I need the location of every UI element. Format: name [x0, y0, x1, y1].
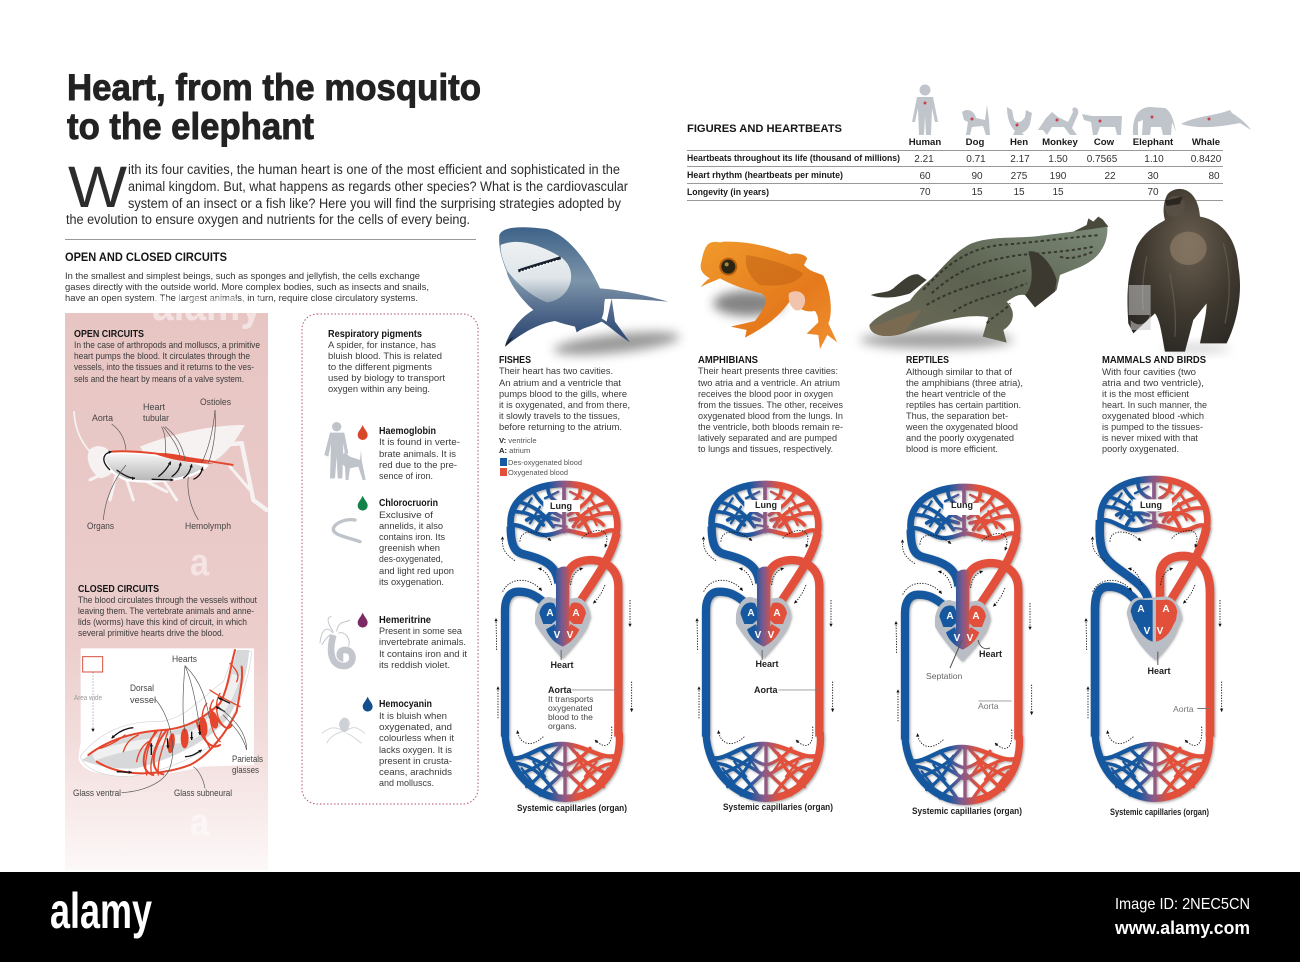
column: amphibians: two atria and a ventricle. An atrium	[698, 377, 840, 388]
column: reptiles: Although similar to that of	[906, 366, 1012, 377]
intro text: W	[68, 155, 127, 220]
column: amphibians: receives the blood poor in oxygen	[698, 388, 833, 399]
column: mammals and birds: With four cavities (two	[1102, 366, 1196, 377]
diagram: worm closed circuit: Dorsal	[130, 683, 154, 693]
column: amphibians: oxygenated blood from the lungs. In	[698, 410, 843, 421]
diagram: worm closed circuit: Area wide	[74, 695, 102, 702]
legend: V: ventricle	[499, 436, 537, 445]
diagram: amphibian circulation	[697, 484, 833, 812]
text: closed circuits	[78, 594, 257, 638]
diagram: mammal circulation: Heart	[1147, 666, 1171, 676]
legend: Des-oxygenated blood	[508, 458, 582, 467]
diagram: reptile circulation: Septation	[926, 671, 963, 681]
diagram: fish circulation	[496, 484, 632, 813]
column: reptiles: ween the oxygenated blood	[905, 421, 1018, 432]
column: reptiles: blood is more efficient.	[906, 443, 998, 454]
footer bar: Image ID: 2NEC5CN	[1115, 896, 1250, 913]
table row labels: Heart rhythm (heartbeats per minute)	[687, 170, 843, 181]
text: circuits intro	[65, 270, 429, 303]
icons: heart markers	[924, 102, 1210, 126]
column: fishes: it is oxygenated, and from there,	[499, 399, 630, 410]
table values: 2.17	[1010, 154, 1030, 165]
pigment: hemeritrine: invertebrate animals.	[379, 636, 466, 647]
diagram: grasshopper open circuit: Hemolymph	[185, 521, 231, 531]
pigment: hemeritrine: It contains iron and it	[379, 648, 467, 659]
illustration: gorilla	[1127, 189, 1240, 352]
pigment: hemocyanin: colourless when it	[379, 732, 454, 743]
pigment: haemoglobin: It is found in verte-	[379, 436, 460, 447]
table values: 1.50	[1048, 154, 1068, 165]
diagram: fish circulation: V	[567, 630, 574, 641]
diagram: amphibian circulation: A	[773, 608, 781, 619]
heading: figures and heartbeats: FIGURES AND HEARTBEATS	[687, 123, 842, 135]
table values: 80	[1208, 171, 1220, 182]
diagram: reptile circulation: Lung	[951, 500, 973, 510]
intro text: the evolution to ensure oxygen and nutrients for the cells of every being.	[66, 212, 470, 227]
column: reptiles: the amphibians (three atria),	[906, 377, 1023, 388]
column: fishes: before returning to the atrium.	[499, 421, 622, 432]
illustration: frog	[701, 242, 837, 349]
text: respiratory pigments intro: oxygen within any being.	[328, 383, 430, 394]
table headers: Whale	[1192, 137, 1220, 148]
diagram: amphibian circulation: Lung	[755, 500, 777, 510]
pigment: chlorocruorin: its oxygenation.	[379, 576, 444, 587]
text: open circuits: heart pumps the blood. It circulates through the	[74, 350, 250, 361]
column: amphibians	[698, 354, 843, 454]
column: amphibians: the ventricle, both bloods remain re-	[698, 421, 843, 432]
diagram: worm closed circuit: Hearts	[172, 654, 197, 664]
text: circuits intro: have an open system. The largest animals, in turn, require close circulatory systems.	[65, 292, 418, 303]
diagram: grasshopper open circuit: Ostioles	[200, 397, 231, 407]
table headers: Elephant	[1133, 137, 1174, 148]
column: mammals and birds: is never mixed with that	[1102, 432, 1198, 443]
illustration: shark	[499, 227, 681, 359]
diagram: fish circulation: Aorta	[548, 685, 572, 695]
diagram: fish circulation: organs.	[548, 721, 577, 731]
pigment: hemeritrine: Hemeritrine	[379, 614, 431, 626]
pigment: hemocyanin: oxygenated, and	[379, 721, 452, 732]
column: mammals and birds: MAMMALS AND BIRDS	[1102, 354, 1206, 366]
table values: 275	[1011, 171, 1028, 182]
footer bar: www.alamy.com	[1114, 918, 1250, 938]
column: amphibians: latively separated and are pumped	[698, 432, 837, 443]
pigment: haemoglobin: brate animals. It is	[379, 448, 456, 459]
diagram: mammal circulation: V	[1144, 626, 1151, 637]
table values: 1.10	[1144, 154, 1164, 165]
diagram: grasshopper open circuit: Heart	[143, 402, 166, 412]
table headers: Dog	[966, 137, 984, 148]
diagram: amphibian circulation: Systemic capillaries (organ)	[723, 802, 833, 812]
table values: 0.71	[966, 154, 986, 165]
pigment: hemocyanin: present in crusta-	[379, 755, 452, 766]
table headers: Cow	[1094, 137, 1115, 148]
diagram: mammal circulation: Systemic capillaries (organ)	[1110, 807, 1209, 817]
text: respiratory pigments intro: to the different pigments	[328, 361, 432, 372]
table values: 0.7565	[1087, 154, 1118, 165]
diagram: mammal circulation: Aorta	[1173, 704, 1194, 714]
table headers: Hen	[1010, 137, 1028, 148]
pigment: haemoglobin: Haemoglobin	[379, 425, 436, 437]
illustration: crocodile	[860, 217, 1108, 349]
table values: 190	[1050, 171, 1067, 182]
column: fishes: Their heart has two cavities.	[499, 365, 613, 376]
table headers: Monkey	[1042, 137, 1079, 148]
diagram: worm closed circuit	[73, 648, 263, 798]
column: mammals and birds	[1102, 354, 1207, 454]
diagram: fish circulation: V	[554, 630, 561, 641]
heading: open circuits: OPEN CIRCUITS	[74, 328, 144, 340]
table values: 15	[1013, 187, 1025, 198]
column: mammals and birds: it is the most efficient	[1102, 388, 1189, 399]
intro text: system of an insect or a fish like? Here you will find the surprising strategies adopted by	[128, 196, 621, 211]
diagram: amphibian circulation: Aorta	[754, 685, 778, 695]
text: respiratory pigments intro: Respiratory pigments	[328, 328, 422, 340]
column: amphibians: to lungs and tissues, respectively.	[698, 443, 833, 454]
pigment: chlorocruorin	[333, 496, 454, 587]
pigment: hemocyanin: ceans, arachnids	[379, 766, 452, 777]
column: fishes: pumps blood to the gills, where	[499, 388, 627, 399]
text: circuits intro: In the smallest and simplest beings, such as sponges and jellyfish, the cells exchange	[65, 270, 420, 281]
diagram: amphibian circulation: V	[755, 630, 762, 641]
pigment: chlorocruorin: des-oxygenated,	[379, 553, 443, 564]
diagram: mammal circulation: A	[1162, 604, 1170, 615]
pigment: chlorocruorin: and light red upon	[379, 565, 454, 576]
diagram: fish circulation: oxygenated	[548, 703, 593, 713]
column: reptiles: the heart ventricle of the	[906, 388, 1006, 399]
column: mammals and birds: is pumped to the tissues-	[1102, 421, 1203, 432]
diagram: worm closed circuit: vessel	[130, 695, 156, 705]
diagram: amphibian circulation: A	[747, 608, 755, 619]
table row labels	[687, 153, 900, 198]
pigment: hemocyanin	[322, 697, 454, 788]
table values: 0.8420	[1191, 154, 1222, 165]
pigment: chlorocruorin: contains iron. Its	[379, 531, 445, 542]
pigment: chlorocruorin: Chlorocruorin	[379, 497, 438, 509]
diagram: reptile circulation	[896, 487, 1032, 816]
pigment: chlorocruorin: Exclusive of	[379, 509, 433, 520]
diagram: reptile circulation: A	[946, 611, 954, 622]
title: Heart, from the mosquito	[67, 67, 481, 108]
icons: animal silhouettes	[912, 84, 1251, 135]
diagram: fish circulation: Heart	[550, 660, 574, 670]
diagram: grasshopper open circuit: Organs	[87, 521, 114, 531]
intro text: animal kingdom. But, what happens as regards other species? What is the cardiovascular	[128, 179, 629, 194]
table values: 60	[919, 171, 931, 182]
diagram: mammal circulation	[1086, 479, 1222, 817]
text: closed circuits: leaving them. The vertebrate animals and anne-	[78, 605, 254, 616]
pigment: hemeritrine	[320, 613, 467, 670]
table values: 15	[971, 187, 983, 198]
table values	[914, 154, 1222, 198]
title: to the elephant	[67, 106, 314, 147]
column: amphibians: AMPHIBIANS	[698, 354, 758, 366]
column: mammals and birds: atria and two ventricle),	[1102, 377, 1204, 388]
diagram: reptile circulation: V	[954, 633, 961, 644]
pigment: chlorocruorin: annelids, it also	[379, 520, 443, 531]
diagram: fish circulation: Lung	[550, 501, 572, 511]
diagram: fish circulation: A	[572, 608, 580, 619]
text: respiratory pigments intro: bluish blood. This is related	[328, 350, 442, 361]
column: amphibians: Their heart presents three cavities:	[698, 365, 838, 376]
pigment: haemoglobin: red due to the pre-	[379, 459, 457, 470]
column: reptiles	[905, 354, 1023, 454]
diagram: reptile circulation: Systemic capillaries (organ)	[912, 806, 1022, 816]
table values: 90	[971, 171, 983, 182]
diagram: worm closed circuit: glasses	[232, 765, 259, 775]
text: open circuits: In the case of arthropods and molluscs, a primitive	[74, 339, 260, 350]
table headers	[909, 137, 1220, 148]
intro text	[66, 155, 629, 227]
heading: open and closed circuits: OPEN AND CLOSED CIRCUITS	[65, 251, 227, 264]
diagram: grasshopper open circuit	[74, 397, 267, 531]
table values: 70	[919, 187, 931, 198]
legend	[499, 436, 582, 477]
pigment: hemocyanin: and molluscs.	[379, 777, 434, 788]
diagram: grasshopper open circuit: tubular	[143, 413, 169, 423]
intro text: ith its four cavities, the human heart is one of the most efficient and sophisticated in the	[128, 162, 620, 177]
column: amphibians: from the tissues. The other, receives	[698, 399, 843, 410]
diagram: fish circulation: blood to the	[548, 712, 593, 722]
pigment: hemeritrine: its reddish violet.	[379, 659, 450, 670]
diagram: worm closed circuit: Parietals	[232, 754, 263, 764]
pigment: hemocyanin: lacks oxygen. It is	[379, 744, 452, 755]
pigment: haemoglobin	[324, 422, 460, 481]
panel: open and closed circuits: alamy	[152, 281, 262, 330]
footer bar: alamy	[50, 883, 152, 939]
text: closed circuits: lids (worms) have this kind of circuit, in which	[78, 616, 247, 627]
text: open circuits: vessels, into the tissues and it returns to the ves-	[74, 361, 254, 372]
legend: A: atrium	[499, 446, 530, 455]
table values: 70	[1147, 187, 1159, 198]
diagram: worm closed circuit: Glass subneural	[174, 788, 232, 798]
diagram: reptile circulation: Heart	[979, 649, 1002, 659]
column: mammals and birds: poorly oxygenated.	[1102, 443, 1179, 454]
diagram: fish circulation: Systemic capillaries (organ)	[517, 803, 627, 813]
column: fishes: FISHES	[499, 354, 531, 366]
legend: Oxygenated blood	[508, 468, 568, 477]
diagram: worm closed circuit: Glass ventral	[73, 788, 121, 798]
column: reptiles: reptiles has certain partition.	[906, 399, 1021, 410]
table values: 2.21	[914, 154, 934, 165]
diagram: reptile circulation: A	[972, 611, 980, 622]
panel: open and closed circuits: a	[190, 542, 210, 584]
diagram: mammal circulation: V	[1157, 626, 1164, 637]
text: open circuits: sels and the heart by means of a valve system.	[74, 373, 244, 384]
text: respiratory pigments intro: A spider, for instance, has	[328, 339, 436, 350]
table values: 30	[1147, 171, 1159, 182]
heading: closed circuits: CLOSED CIRCUITS	[78, 583, 159, 595]
column: fishes: An atrium and a ventricle that	[499, 377, 621, 388]
column: mammals and birds: heart. In such manner, the	[1102, 399, 1207, 410]
text: circuits intro: gases directly with the outside world. More complex bodies, such as insects and snails,	[65, 281, 429, 292]
column: reptiles: and the poorly oxygenated	[906, 432, 1014, 443]
footer bar	[0, 872, 1300, 962]
text: respiratory pigments intro: used by biology to transport	[328, 372, 445, 383]
panel: open and closed circuits: a	[190, 802, 210, 844]
diagram: reptile circulation: Aorta	[978, 701, 999, 711]
table row labels: Longevity (in years)	[687, 187, 769, 198]
column: reptiles: Thus, the separation bet-	[906, 410, 1008, 421]
column: fishes: it slowly travels to the tissues,	[499, 410, 620, 421]
diagram: mammal circulation: Lung	[1140, 500, 1162, 510]
pigment: chlorocruorin: greenish when	[379, 542, 440, 553]
diagram: grasshopper open circuit: Aorta	[92, 413, 113, 423]
diagram: fish circulation: A	[546, 608, 554, 619]
diagram: mammal circulation: A	[1137, 604, 1145, 615]
text: closed circuits: several primitive hearts drive the blood.	[78, 627, 224, 638]
diagram: amphibian circulation: V	[768, 630, 775, 641]
pigment: haemoglobin: sence of iron.	[379, 470, 433, 481]
table row labels: Heartbeats throughout its life (thousand of millions)	[687, 153, 900, 164]
pigment: hemeritrine: Present in some sea	[379, 625, 463, 636]
text: closed circuits: The blood circulates through the vessels without	[78, 594, 257, 605]
column: mammals and birds: oxygenated blood -which	[1102, 410, 1204, 421]
text: open circuits	[74, 339, 260, 384]
panel: respiratory pigments	[302, 314, 478, 804]
table headers: Human	[909, 137, 941, 148]
diagram: fish circulation: It transports	[548, 694, 593, 704]
table: figures and heartbeats	[687, 84, 1251, 201]
table values: 22	[1104, 171, 1116, 182]
table values: 15	[1052, 187, 1064, 198]
pigment: hemocyanin: It is bluish when	[379, 710, 447, 721]
text: respiratory pigments intro	[328, 328, 445, 394]
column: fishes	[499, 354, 630, 477]
diagram: amphibian circulation: Heart	[755, 659, 779, 669]
diagram: reptile circulation: V	[967, 633, 974, 644]
title	[67, 67, 481, 147]
pigment: hemocyanin: Hemocyanin	[379, 698, 432, 710]
column: reptiles: REPTILES	[906, 354, 949, 366]
